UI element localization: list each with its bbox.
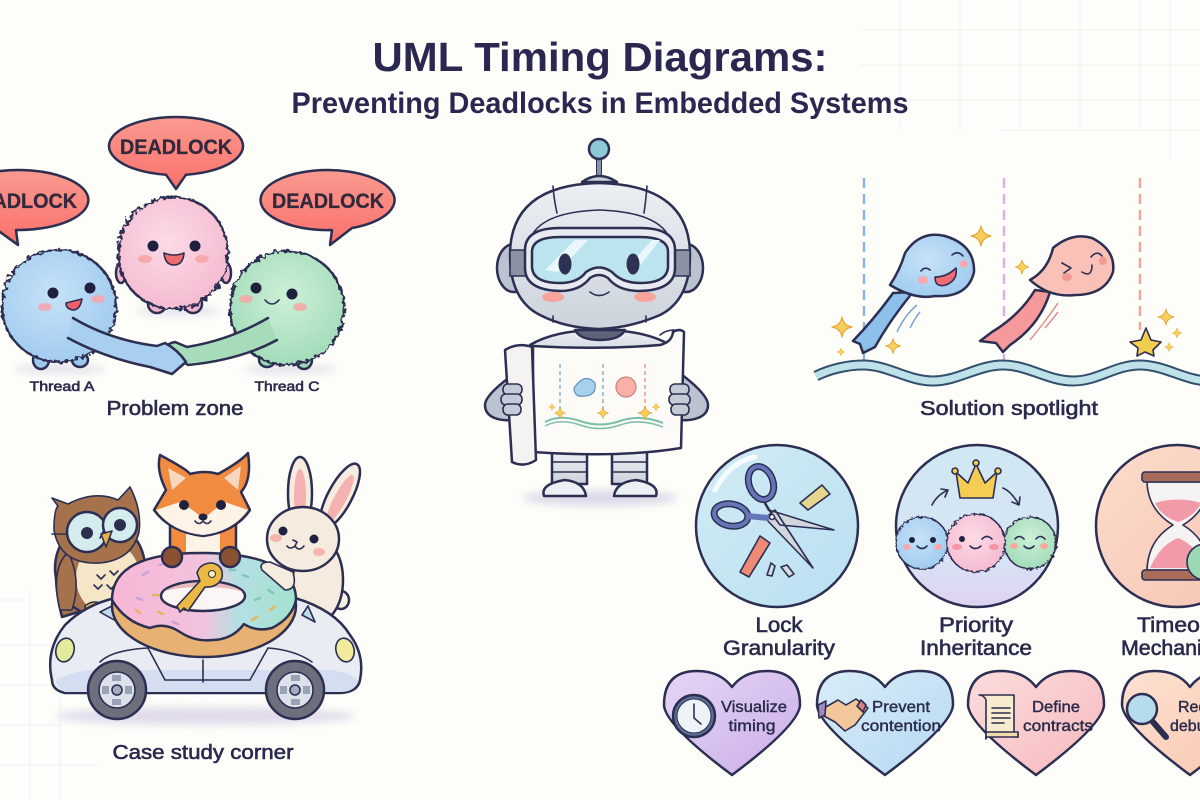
speech bubble: right: DEADLOCK [272, 190, 384, 213]
label: Priority Inheritance [920, 614, 1032, 660]
bubble with scissors [696, 445, 858, 607]
label: Lock Granularity [723, 614, 836, 660]
text: Visualize timing: timing [728, 718, 776, 735]
character: fox [154, 453, 250, 570]
robot hands [501, 384, 690, 415]
label: Case study corner: Case study corner [112, 742, 294, 764]
label: Problem zone: Problem zone [106, 398, 244, 420]
label: Priority Inheritance: Priority [939, 614, 1014, 637]
paws resting on donut [162, 547, 294, 590]
car shadow [55, 707, 355, 725]
title: UML Timing Diagrams: [372, 34, 828, 80]
panel: timeout mechanisms [1096, 445, 1200, 660]
label: Priority Inheritance: Inheritance [920, 637, 1032, 660]
head [497, 183, 703, 329]
icon: contract scroll [979, 695, 1018, 739]
timing wave [816, 365, 1200, 381]
label: Thread C: Thread C [254, 378, 320, 394]
character: blue comet [853, 235, 974, 353]
timing lifelines [864, 178, 1140, 360]
speech bubble: centre: DEADLOCK [120, 136, 232, 159]
donut with key [112, 553, 296, 657]
text: Prevent contention [861, 699, 941, 735]
heart: reduce debugging [1122, 671, 1200, 775]
label: Solution spotlight: Solution spotlight [920, 398, 1099, 420]
text: Visualize timing [721, 699, 787, 735]
icon: handshake [818, 699, 868, 731]
handshake arms [68, 318, 277, 374]
antenna [582, 139, 617, 182]
bubble with hourglass [1096, 445, 1200, 607]
heart: visualize timing [664, 671, 800, 775]
speech bubble: centre [109, 117, 243, 189]
character: green thread C [230, 251, 344, 374]
heart: prevent contention [817, 671, 953, 775]
text: Prevent contention: Prevent [872, 699, 931, 716]
text: Define contracts [1023, 699, 1093, 735]
heart: define contracts [968, 671, 1104, 775]
panel: solution spotlight [816, 178, 1200, 420]
label: Lock Granularity: Lock [756, 614, 803, 637]
title [292, 34, 908, 120]
text: Define contracts: contracts [1023, 718, 1093, 735]
robot holding timing diagram [485, 139, 708, 506]
character: owl [52, 487, 145, 617]
text: Define contracts: Define [1032, 699, 1080, 716]
panel: case study corner [50, 453, 367, 764]
panel: lock granularity [696, 445, 858, 660]
label: Timeout Mechanisms [1121, 614, 1200, 660]
text: Visualize timing: Visualize [721, 699, 787, 716]
character: pink comet [980, 236, 1113, 352]
body and legs [485, 330, 708, 496]
timing scroll [505, 330, 684, 465]
character: rabbit [267, 457, 367, 622]
text: Reduce debugging [1170, 699, 1200, 735]
panel: priority inheritance [896, 445, 1058, 660]
icon: clock [673, 695, 715, 737]
character: pink thread [116, 197, 231, 316]
label: Lock Granularity: Granularity [723, 637, 836, 660]
icon: magnifier [1127, 694, 1166, 737]
subtitle: Preventing Deadlocks in Embedded Systems [292, 87, 908, 120]
text: Prevent contention: contention [861, 718, 941, 735]
panel: problem zone [0, 117, 395, 420]
car [50, 598, 361, 719]
speech bubble: left [0, 170, 88, 245]
speech bubble: right [261, 170, 395, 245]
sparkles and gold star [832, 226, 1182, 356]
bubble with crown and threads [896, 445, 1058, 607]
character: blue thread A [2, 250, 116, 374]
label: Thread A: Thread A [30, 378, 95, 394]
robot shadow [522, 490, 678, 506]
